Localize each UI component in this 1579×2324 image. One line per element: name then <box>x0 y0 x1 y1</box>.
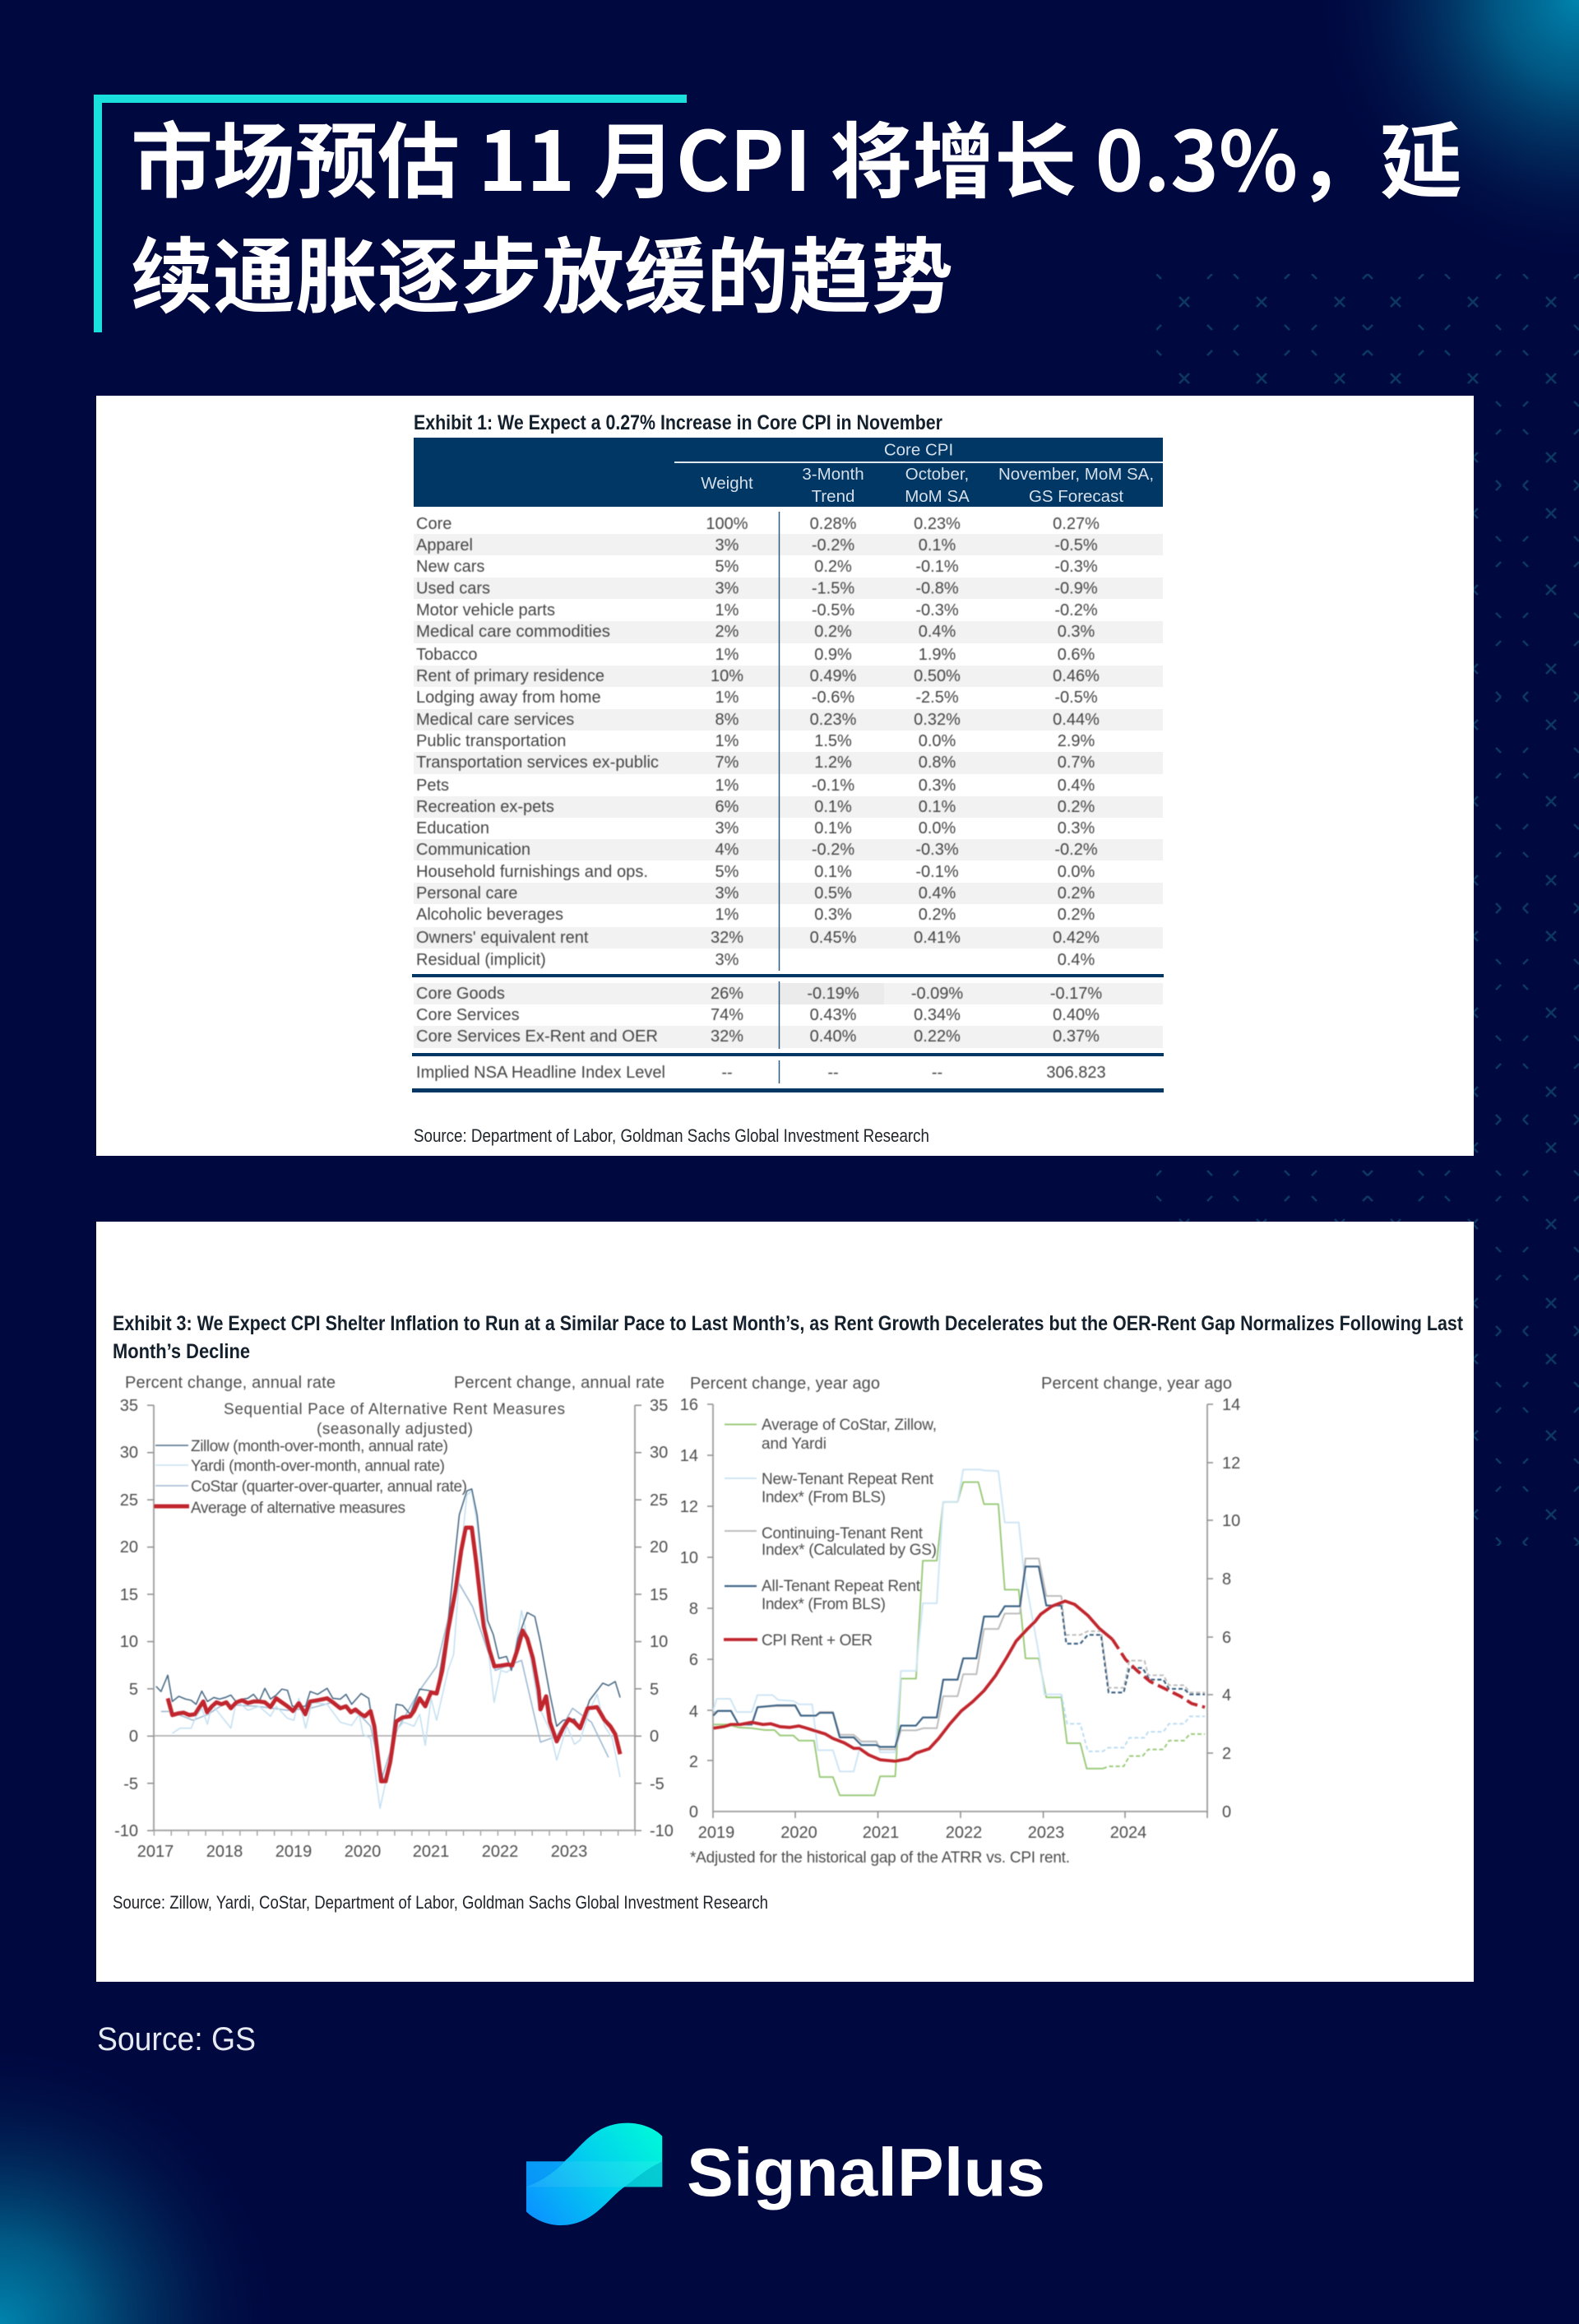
row: Apparel <box>416 536 1098 554</box>
table header: GS Forecast <box>1029 487 1123 506</box>
row: Lodging away from home: -2.5% <box>915 689 959 707</box>
right chart right y labels: 8 <box>1222 1570 1231 1589</box>
row: Apparel: -0.2% <box>812 536 854 554</box>
series: Yardi <box>173 1491 620 1808</box>
row: Tobacco: 1% <box>715 646 739 664</box>
row: New cars: New cars <box>416 558 484 576</box>
row: Pets: 0.3% <box>919 777 956 795</box>
row: Recreation ex-pets: Recreation ex-pets <box>416 798 554 816</box>
row: Personal care: 3% <box>715 884 739 902</box>
table header: MoM SA <box>905 487 970 506</box>
row: Pets: Pets <box>416 777 449 795</box>
row: Transportation services ex-public: 0.8% <box>919 754 956 772</box>
left chart title: (seasonally adjusted) <box>317 1421 473 1438</box>
row: Core: 0.23% <box>914 515 961 533</box>
left chart right y labels: -10 <box>650 1822 674 1840</box>
left chart x labels: 2020 <box>345 1843 381 1861</box>
row: New cars: -0.3% <box>1054 558 1098 576</box>
row: Household furnishings and ops.: 0.0% <box>1058 863 1095 881</box>
table header: October, <box>905 465 969 484</box>
row: Implied NSA Headline Index Level: -- <box>827 1064 839 1082</box>
right chart x labels: 2024 <box>1110 1824 1146 1842</box>
left chart right y labels <box>650 1397 674 1840</box>
row: Recreation ex-pets: 6% <box>715 798 739 816</box>
right chart unit labels: Percent change, year ago <box>690 1375 880 1393</box>
row: Public transportation: 2.9% <box>1058 732 1095 750</box>
row: New cars <box>416 558 1098 576</box>
row: Motor vehicle parts: -0.5% <box>812 601 854 619</box>
row: Pets: -0.1% <box>812 777 854 795</box>
row: Recreation ex-pets: 0.1% <box>919 798 956 816</box>
row: Personal care <box>416 884 1095 902</box>
row: Lodging away from home: Lodging away from home <box>416 689 601 707</box>
row: Household furnishings and ops. <box>416 863 1095 881</box>
row: Implied NSA Headline Index Level: -- <box>932 1064 942 1082</box>
row: Alcoholic beverages <box>416 906 1095 924</box>
row: Medical care commodities: 2% <box>715 623 739 641</box>
table header: November, MoM SA, <box>998 465 1154 484</box>
left chart right y labels: 10 <box>650 1633 668 1651</box>
table source: Source: Department of Labor, Goldman Sachs Global Investment Research <box>414 1125 929 1146</box>
row: Education: 0.1% <box>814 819 852 837</box>
row: Communication: 4% <box>715 841 739 859</box>
right chart right y labels: 2 <box>1222 1745 1231 1763</box>
row: Transportation services ex-public: 1.2% <box>814 754 852 772</box>
right chart left y labels: 2 <box>689 1753 698 1771</box>
series: CPI rent + OER <box>713 1601 1205 1761</box>
series: continuing-tenant rent index <box>713 1558 1205 1750</box>
row: Lodging away from home <box>416 689 1098 707</box>
row: Implied NSA Headline Index Level: Implied NSA Headline Index Level <box>416 1064 665 1082</box>
left chart left y labels <box>114 1397 138 1840</box>
right chart legend <box>724 1417 937 1649</box>
row: Core: 100% <box>706 515 748 533</box>
row: Core Services Ex-Rent and OER: 0.22% <box>914 1027 961 1046</box>
row: Education: Education <box>416 819 489 837</box>
right chart left y labels <box>680 1396 698 1821</box>
row: Core Services <box>416 1006 1100 1024</box>
row: Pets: 0.4% <box>1058 777 1095 795</box>
left chart left y labels: 35 <box>120 1397 138 1415</box>
right chart left y labels: 16 <box>680 1396 698 1414</box>
exhibit 3 heading: Month’s Decline <box>113 1340 250 1363</box>
right chart left y labels: 10 <box>680 1549 698 1567</box>
row: Communication: Communication <box>416 841 530 859</box>
left chart left y labels: 30 <box>120 1444 138 1462</box>
row: Rent of primary residence: 0.46% <box>1053 667 1100 685</box>
row: Alcoholic beverages: 0.2% <box>919 906 956 924</box>
right chart right y labels: 6 <box>1222 1629 1231 1647</box>
row: New cars: -0.1% <box>915 558 959 576</box>
row: Household furnishings and ops.: -0.1% <box>915 863 959 881</box>
right chart x labels <box>698 1824 1146 1842</box>
row: Core Services: 0.40% <box>1053 1006 1100 1024</box>
right chart legend: Index* (From BLS) <box>762 1596 886 1613</box>
right chart legend: Average of CoStar, Zillow, <box>762 1417 937 1434</box>
table header: Core CPI <box>884 441 953 459</box>
row: Personal care: 0.5% <box>814 884 852 902</box>
left chart left y labels: 0 <box>129 1728 138 1746</box>
row: Core Services: Core Services <box>416 1006 520 1024</box>
row: Transportation services ex-public: 0.7% <box>1058 754 1095 772</box>
row: Owners' equivalent rent: 0.41% <box>914 929 961 947</box>
row: Core Services: 0.34% <box>914 1006 961 1024</box>
left chart legend: Average of alternative measures <box>191 1500 405 1517</box>
row: Household furnishings and ops.: 0.1% <box>814 863 852 881</box>
right chart x labels: 2021 <box>863 1824 899 1842</box>
row: Apparel: -0.5% <box>1054 536 1098 554</box>
left chart title: Sequential Pace of Alternative Rent Measures <box>224 1401 565 1418</box>
left chart left y labels: -5 <box>123 1775 138 1793</box>
left chart series <box>156 1489 620 1808</box>
row: Used cars <box>416 579 1098 597</box>
row: Used cars: 3% <box>715 579 739 597</box>
left chart legend: Zillow (month-over-month, annual rate) <box>191 1438 448 1455</box>
panel: shelter inflation charts <box>96 1222 1474 1982</box>
left chart axes <box>150 1405 638 1833</box>
row: Medical care commodities: 0.2% <box>814 623 852 641</box>
series: average of alternative measures <box>168 1528 620 1781</box>
row: Medical care commodities: 0.4% <box>919 623 956 641</box>
row: Owners' equivalent rent <box>416 929 1100 947</box>
row: Used cars: -1.5% <box>812 579 854 597</box>
chart source: Source: Zillow, Yardi, CoStar, Department of Labor, Goldman Sachs Global Investment Research <box>113 1892 768 1913</box>
panel: core CPI table <box>96 396 1474 1156</box>
row: Lodging away from home: 1% <box>715 689 739 707</box>
row: Motor vehicle parts: -0.3% <box>915 601 959 619</box>
table rows <box>416 515 1106 1082</box>
chart: sequential pace of alternative rent measures <box>114 1374 674 1861</box>
row: Motor vehicle parts <box>416 601 1098 619</box>
row: Rent of primary residence: 0.50% <box>914 667 961 685</box>
row: Alcoholic beverages: 0.2% <box>1058 906 1095 924</box>
row: Rent of primary residence <box>416 667 1100 685</box>
row: Used cars: Used cars <box>416 579 490 597</box>
row: Apparel: 0.1% <box>919 536 956 554</box>
left chart legend <box>154 1438 467 1517</box>
row: Household furnishings and ops.: 5% <box>715 863 739 881</box>
row: Medical care commodities: Medical care commodities <box>416 623 610 641</box>
left chart right y labels: 30 <box>650 1444 668 1462</box>
right chart x labels: 2019 <box>698 1824 734 1842</box>
left chart x labels: 2017 <box>137 1843 174 1861</box>
left chart left y labels: 15 <box>120 1586 138 1604</box>
right chart left y labels: 4 <box>689 1703 698 1721</box>
right chart legend: Index* (From BLS) <box>762 1489 886 1506</box>
row: Tobacco <box>416 646 1095 664</box>
right chart right y labels: 4 <box>1222 1686 1231 1705</box>
row: Education: 0.0% <box>919 819 956 837</box>
row: Personal care: 0.2% <box>1058 884 1095 902</box>
row: Public transportation <box>416 732 1095 750</box>
left chart title <box>224 1401 565 1438</box>
row: Communication: -0.2% <box>1054 841 1098 859</box>
row: Transportation services ex-public: Transportation services ex-public <box>416 754 659 772</box>
row: Core: Core <box>416 515 451 533</box>
row: Owners' equivalent rent: 32% <box>711 929 743 947</box>
row: Education: 0.3% <box>1058 819 1095 837</box>
row: Core Services Ex-Rent and OER: 0.40% <box>810 1027 857 1046</box>
row: Implied NSA Headline Index Level <box>416 1064 1106 1082</box>
exhibit 1 heading: Exhibit 1: We Expect a 0.27% Increase in Core CPI in November <box>414 411 942 434</box>
left chart right y labels: 0 <box>650 1728 659 1746</box>
right chart right y labels: 14 <box>1222 1396 1240 1414</box>
row: Core Services Ex-Rent and OER: Core Services Ex-Rent and OER <box>416 1027 658 1046</box>
row: Rent of primary residence: 0.49% <box>810 667 857 685</box>
source note: Source: GS <box>97 2021 256 2057</box>
row: Transportation services ex-public: 7% <box>715 754 739 772</box>
row: Core Goods: 26% <box>711 985 743 1003</box>
row: Public transportation: Public transportation <box>416 732 566 750</box>
left chart x labels: 2022 <box>482 1843 518 1861</box>
row: Owners' equivalent rent: 0.42% <box>1053 929 1100 947</box>
row: Core Goods <box>416 985 1102 1003</box>
left chart right y labels: 15 <box>650 1586 668 1604</box>
brand name: SignalPlus <box>687 2134 1045 2210</box>
row: Personal care: 0.4% <box>919 884 956 902</box>
left chart left y labels: 20 <box>120 1538 138 1556</box>
row: Public transportation: 1.5% <box>814 732 852 750</box>
row: Used cars: -0.9% <box>1054 579 1098 597</box>
row: Rent of primary residence: 10% <box>711 667 743 685</box>
chart: rent indices vs CPI rent + OER <box>680 1375 1240 1867</box>
row: Core <box>416 515 1100 533</box>
row: Tobacco: Tobacco <box>416 646 477 664</box>
row: Core Goods: -0.17% <box>1050 985 1102 1003</box>
right chart right y labels: 12 <box>1222 1454 1240 1473</box>
row: Recreation ex-pets <box>416 798 1095 816</box>
row: Owners' equivalent rent: 0.45% <box>810 929 857 947</box>
right chart unit labels <box>690 1375 1232 1393</box>
row: Used cars: -0.8% <box>915 579 959 597</box>
right chart right y labels: 0 <box>1222 1803 1231 1821</box>
left chart right y labels: 25 <box>650 1491 668 1510</box>
row: Medical care services <box>416 711 1100 729</box>
right chart series <box>713 1469 1205 1795</box>
left chart legend: Yardi (month-over-month, annual rate) <box>191 1458 445 1475</box>
right chart left y labels: 0 <box>689 1803 698 1821</box>
row: New cars: 5% <box>715 558 739 576</box>
table header <box>414 438 1163 507</box>
left chart right y labels: 5 <box>650 1681 659 1699</box>
right chart legend: All-Tenant Repeat Rent <box>762 1578 921 1595</box>
row: Recreation ex-pets: 0.2% <box>1058 798 1095 816</box>
row: Medical care services: 8% <box>715 711 739 729</box>
series: new-tenant repeat rent index <box>713 1469 1205 1771</box>
table header: 3-Month <box>802 465 864 484</box>
row: Motor vehicle parts: 1% <box>715 601 739 619</box>
left chart legend: CoStar (quarter-over-quarter, annual rate) <box>191 1478 467 1496</box>
series: all-tenant repeat rent index <box>713 1566 1205 1746</box>
icon: SignalPlus logo mark <box>526 2123 662 2225</box>
row: Core Goods: -0.19% <box>807 985 859 1003</box>
right chart footnote: *Adjusted for the historical gap of the ATRR vs. CPI rent. <box>690 1849 1070 1867</box>
row: New cars: 0.2% <box>814 558 852 576</box>
row: Apparel: Apparel <box>416 536 473 554</box>
row: Rent of primary residence: Rent of primary residence <box>416 667 604 685</box>
zebra stripes <box>414 534 1163 1048</box>
title bracket <box>94 95 687 332</box>
row: Communication: -0.3% <box>915 841 959 859</box>
exhibit 3 heading <box>113 1312 1464 1363</box>
row: Core: 0.27% <box>1053 515 1100 533</box>
row: Core: 0.28% <box>810 515 857 533</box>
series: CoStar <box>161 1580 609 1778</box>
row: Personal care: Personal care <box>416 884 517 902</box>
row: Lodging away from home: -0.6% <box>812 689 854 707</box>
table header: Trend <box>812 487 854 506</box>
series: Zillow <box>156 1489 620 1782</box>
row: Core Services: 0.43% <box>810 1006 857 1024</box>
row: Motor vehicle parts: Motor vehicle parts <box>416 601 555 619</box>
title: 市场预估 11 月CPI 将增长 0.3%，延 <box>131 95 1462 215</box>
right chart legend: Index* (Calculated by GS) <box>762 1542 937 1559</box>
right chart left y labels: 8 <box>689 1600 698 1618</box>
row: Communication <box>416 841 1098 859</box>
row: Communication: -0.2% <box>812 841 854 859</box>
title: 续通胀逐步放缓的趋势 <box>131 211 953 330</box>
row: Medical care services: Medical care services <box>416 711 574 729</box>
row: Public transportation: 1% <box>715 732 739 750</box>
right chart legend: Continuing-Tenant Rent <box>762 1525 924 1542</box>
left chart x labels: 2019 <box>276 1843 312 1861</box>
left chart x labels: 2023 <box>551 1843 587 1861</box>
row: Core Services Ex-Rent and OER <box>416 1027 1100 1046</box>
row: Residual (implicit) <box>416 951 1095 969</box>
left chart left y labels: 10 <box>120 1633 138 1651</box>
row: Recreation ex-pets: 0.1% <box>814 798 852 816</box>
right chart left y labels: 14 <box>680 1447 698 1465</box>
table header: Weight <box>701 474 753 493</box>
table column divider <box>778 512 780 1083</box>
row: Tobacco: 0.9% <box>814 646 852 664</box>
row: Pets: 1% <box>715 777 739 795</box>
left chart left y labels: 5 <box>129 1681 138 1699</box>
left chart left y labels: -10 <box>114 1822 138 1840</box>
row: Alcoholic beverages: 0.3% <box>814 906 852 924</box>
row: Apparel: 3% <box>715 536 739 554</box>
left chart x labels: 2021 <box>413 1843 449 1861</box>
row: Medical care commodities <box>416 623 1095 641</box>
right chart right y labels: 10 <box>1222 1512 1240 1530</box>
right chart legend: CPI Rent + OER <box>762 1632 873 1649</box>
row: Motor vehicle parts: -0.2% <box>1054 601 1098 619</box>
row: Household furnishings and ops.: Household furnishings and ops. <box>416 863 648 881</box>
left chart unit labels: Percent change, annual rate <box>454 1374 664 1392</box>
row: Core Services Ex-Rent and OER: 0.37% <box>1053 1027 1100 1046</box>
right chart legend: New-Tenant Repeat Rent <box>762 1471 934 1488</box>
row: Core Services: 74% <box>711 1006 743 1024</box>
row: Tobacco: 0.6% <box>1058 646 1095 664</box>
row: Alcoholic beverages: 1% <box>715 906 739 924</box>
row: Medical care services: 0.32% <box>914 711 961 729</box>
right chart axes <box>707 1404 1213 1818</box>
left chart right y labels: 20 <box>650 1538 668 1556</box>
left chart unit labels: Percent change, annual rate <box>125 1374 336 1392</box>
left chart unit labels <box>125 1374 664 1392</box>
left chart left y labels: 25 <box>120 1491 138 1510</box>
left chart x labels <box>137 1843 587 1861</box>
row: Residual (implicit): 0.4% <box>1058 951 1095 969</box>
row: Owners' equivalent rent: Owners' equivalent rent <box>416 929 589 947</box>
row: Residual (implicit): Residual (implicit) <box>416 951 546 969</box>
row: Core Goods: -0.09% <box>911 985 963 1003</box>
right chart right y labels <box>1222 1396 1240 1821</box>
row: Medical care services: 0.44% <box>1053 711 1100 729</box>
row: Public transportation: 0.0% <box>919 732 956 750</box>
left chart x labels: 2018 <box>206 1843 243 1861</box>
row: Education: 3% <box>715 819 739 837</box>
row: Medical care commodities: 0.3% <box>1058 623 1095 641</box>
title <box>131 95 1462 330</box>
right chart x labels: 2023 <box>1028 1824 1064 1842</box>
right chart x labels: 2022 <box>946 1824 982 1842</box>
row: Alcoholic beverages: Alcoholic beverages <box>416 906 563 924</box>
left chart right y labels: 35 <box>650 1397 668 1415</box>
row: Implied NSA Headline Index Level: -- <box>721 1064 733 1082</box>
row: Implied NSA Headline Index Level: 306.823 <box>1046 1064 1106 1082</box>
row: Tobacco: 1.9% <box>919 646 956 664</box>
row: Pets <box>416 777 1095 795</box>
right chart unit labels: Percent change, year ago <box>1041 1375 1232 1393</box>
row: Medical care services: 0.23% <box>810 711 857 729</box>
table rules <box>412 974 1164 1092</box>
left chart right y labels: -5 <box>650 1775 664 1793</box>
right chart x labels: 2020 <box>780 1824 817 1842</box>
series: average of CoStar, Zillow, Yardi <box>713 1482 1205 1795</box>
row: Core Services Ex-Rent and OER: 32% <box>711 1027 743 1046</box>
row: Core Goods: Core Goods <box>416 985 505 1003</box>
row: Education <box>416 819 1095 837</box>
right chart legend: and Yardi <box>762 1436 827 1453</box>
row: Residual (implicit): 3% <box>715 951 739 969</box>
right chart left y labels: 6 <box>689 1651 698 1669</box>
row: Transportation services ex-public <box>416 754 1095 772</box>
row: Lodging away from home: -0.5% <box>1054 689 1098 707</box>
right chart left y labels: 12 <box>680 1498 698 1516</box>
